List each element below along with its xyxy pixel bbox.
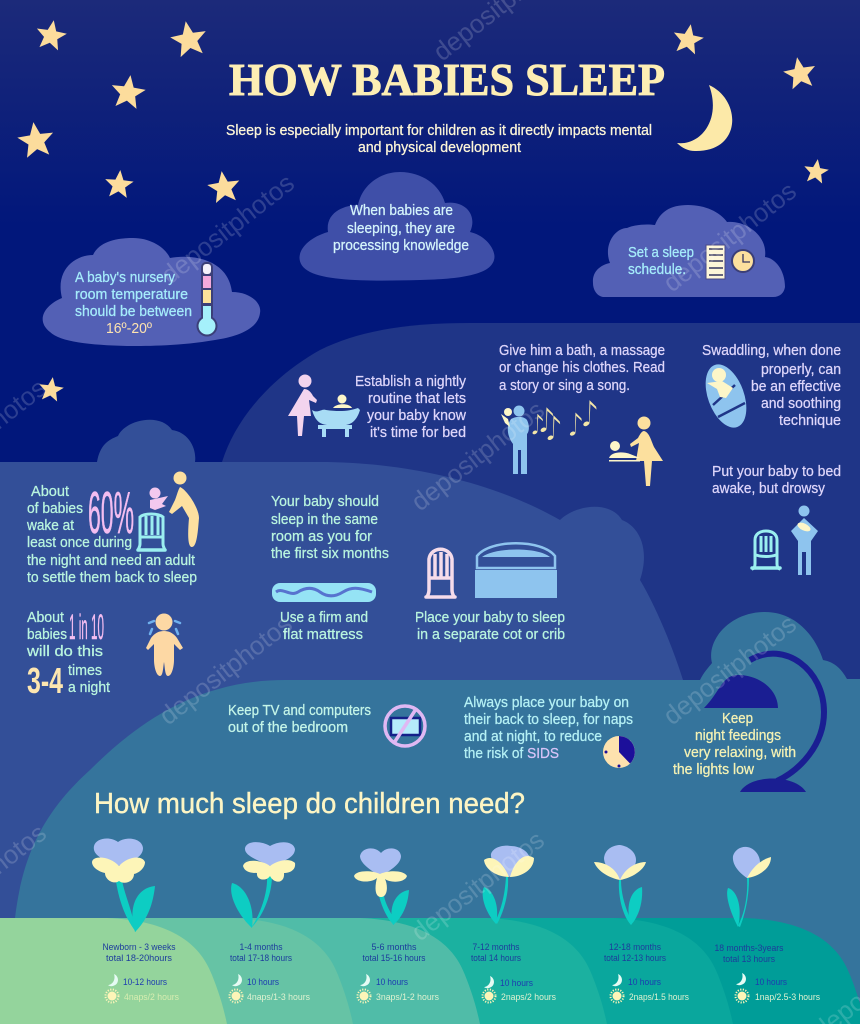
cloud: nursery temperature: [43, 238, 260, 346]
icon: crib: [426, 549, 455, 597]
text: 60 percent wake: the night and need an adult: [27, 553, 195, 569]
column: 1-4 months: 1-4 months: [240, 942, 283, 953]
text: no TV: Keep TV and computers: [228, 703, 371, 719]
cloud: processing knowledge: [300, 172, 494, 281]
stat: 3-4: 3-4: [27, 660, 63, 701]
icon: music notes: [532, 400, 597, 440]
text: same room: sleep in the same: [271, 512, 378, 528]
column: 1-4 months: [230, 942, 310, 1003]
icon: schedule sheet: [706, 245, 725, 279]
text: 1 in 10 babies: About: [27, 610, 64, 626]
watermarks: depositphotos: [405, 825, 550, 947]
column: 5-6 months: 10 hours: [376, 977, 408, 988]
text: swaddling: properly, can: [761, 362, 841, 378]
column: 18 months-3 years: total 13 hours: [723, 954, 775, 965]
cloud: processing knowledge: processing knowledge: [333, 238, 469, 254]
text: 60 percent wake: wake at: [26, 518, 74, 534]
heading: how much sleep: How much sleep do children need?: [94, 788, 525, 820]
cloud: nursery temperature: room temperature: [75, 287, 188, 303]
column: 12-18 months: 12-18 months: [609, 942, 661, 953]
cloud: sleep schedule: Set a sleep: [628, 245, 694, 261]
text: 1 in 10 babies: times: [68, 663, 102, 679]
flower: 1-4 months: [231, 842, 295, 928]
column: 12-18 months: total 12-13 hours: [604, 953, 666, 964]
text: back to sleep SIDS: Always place your baby on: [464, 695, 629, 711]
text: separate cot: [415, 610, 565, 643]
column: 7-12 months: 2naps/2 hours: [501, 992, 556, 1003]
icon: swaddled baby: [698, 359, 754, 433]
title: HOW BABIES SLEEP: [229, 54, 665, 105]
hill: teal layer with cloud: [15, 612, 860, 1024]
column: 5-6 months: total 15-16 hours: [362, 953, 426, 964]
column: 12-18 months: 10 hours: [628, 977, 661, 988]
icon: clock pie: [603, 736, 635, 768]
text: 1 in 10 babies: will do this: [26, 644, 103, 660]
ground hills: [0, 918, 860, 1024]
text: awake but drowsy: awake, but drowsy: [712, 481, 826, 497]
column: 12-18 months: [604, 942, 689, 1003]
subtitle: [226, 123, 652, 156]
column: 1-4 months: 4naps/1-3 hours: [247, 992, 310, 1003]
text: 1 in 10 babies: [26, 608, 110, 696]
text: swaddling: technique: [779, 413, 841, 429]
column: 5-6 months: 5-6 months: [372, 942, 417, 953]
flower: 5-6 months: [354, 848, 409, 925]
text: 60 percent wake: to settle them back to sleep: [27, 570, 197, 586]
text: firm mattress: Use a firm and: [280, 610, 368, 626]
text: swaddling: and soothing: [761, 396, 841, 412]
icon: person holding baby by crib: [752, 506, 818, 575]
flower: 18 months-3 years: [727, 847, 771, 927]
column: newborn: 4naps/2 hours: [124, 992, 179, 1003]
text: nightly routine: routine that lets: [368, 391, 466, 407]
text: swaddling: [702, 343, 841, 429]
column: 7-12 months: 10 hours: [500, 978, 533, 989]
text: 1 in 10 babies: babies: [27, 627, 67, 643]
text: back to sleep SIDS: their back to sleep, for naps: [464, 712, 633, 728]
icon: clock: [732, 250, 754, 272]
subtitle: Sleep is especially important for children as it directly impacts mental: [226, 123, 652, 139]
text: 60 percent wake: of babies: [27, 501, 83, 517]
text: awake but drowsy: [712, 464, 841, 497]
text: bath and massage: Give him a bath, a massage: [499, 343, 665, 359]
text: night feedings: the lights low: [673, 762, 755, 778]
text: night feedings: Keep: [722, 711, 753, 727]
text: night feedings: [673, 711, 796, 778]
column: 7-12 months: total 14 hours: [471, 953, 521, 964]
text: back to sleep SIDS: [464, 695, 633, 762]
subtitle: and physical development: [358, 140, 521, 156]
text: nightly routine: it's time for bed: [370, 425, 466, 441]
text: bath and massage: a story or sing a song.: [499, 378, 630, 394]
text: 1 in 10 babies: a night: [68, 680, 110, 696]
text: no TV: out of the bedroom: [228, 720, 348, 736]
column: 18 months-3 years: 1nap/2.5-3 hours: [755, 992, 820, 1003]
flower: newborn: [92, 839, 155, 932]
text: swaddling: Swaddling, when done: [702, 343, 841, 359]
icon: no television: [385, 706, 425, 746]
icon: mother and bath: [288, 374, 360, 437]
text: back to sleep SIDS: the risk of SIDS: [464, 746, 559, 762]
cloud: nursery temperature: should be between: [75, 304, 192, 320]
text: no TV: [228, 703, 371, 736]
column: 12-18 months: 2naps/1.5 hours: [629, 992, 689, 1003]
text: back to sleep SIDS: and at night, to reduce: [464, 729, 602, 745]
column: 7-12 months: [471, 942, 556, 1003]
text: swaddling: be an effective: [751, 379, 841, 395]
column: newborn: [102, 942, 179, 1003]
text: nightly routine: Establish a nightly: [355, 374, 467, 390]
column: 18 months-3 years: [714, 943, 820, 1003]
text: 60 percent wake: 60%: [88, 480, 134, 546]
hill: middle layer with clouds: [0, 420, 683, 1024]
icon: thermometer: [196, 262, 218, 336]
column: 5-6 months: 3naps/1-2 hours: [376, 992, 439, 1003]
watermarks: depositphotos: [657, 176, 802, 298]
icon: adult lifting baby from crib: [138, 472, 199, 550]
text: firm mattress: [280, 610, 368, 643]
text: 60 percent wake: [26, 480, 197, 586]
cloud: nursery temperature: A baby's nursery: [75, 270, 176, 286]
text: bath and massage: or change his clothes. Read: [499, 360, 665, 376]
cloud: nursery temperature: 16º-20º: [106, 321, 153, 337]
text: bath and massage: [499, 343, 665, 394]
column: 7-12 months: 7-12 months: [472, 942, 520, 953]
text: 60 percent wake: least once during: [27, 535, 132, 551]
column: 18 months-3 years: 18 months-3years: [714, 943, 784, 954]
icon: crying baby: [146, 614, 183, 676]
cloud: sleep schedule: [593, 205, 785, 297]
text: 1 in 10: [69, 608, 104, 647]
cloud: sleep schedule: schedule.: [628, 262, 686, 278]
icon: lamp: [704, 654, 824, 792]
text: same room: the first six months: [271, 546, 389, 562]
text: nightly routine: [355, 374, 467, 441]
text: 60 percent wake: About: [31, 484, 69, 500]
column: 18 months-3 years: 10 hours: [755, 977, 787, 988]
icon: mother massaging baby: [609, 416, 663, 486]
hill: back layer: [222, 323, 860, 700]
watermarks: depositphotos: [657, 609, 802, 731]
column: newborn: 10-12 hours: [123, 977, 167, 988]
text: nightly routine: your baby know: [367, 408, 467, 424]
flower: 12-18 months: [594, 845, 646, 925]
text: separate cot: Place your baby to sleep: [415, 610, 565, 626]
cloud: processing knowledge: When babies are: [350, 203, 453, 219]
text: same room: Your baby should: [271, 494, 379, 510]
text: firm mattress: flat mattress: [283, 627, 363, 643]
watermarks: depositphotos: [153, 609, 298, 731]
text: same room: [271, 494, 389, 562]
text: night feedings: night feedings: [695, 728, 781, 744]
watermarks: depositphotos: [155, 168, 300, 290]
text: same room: room as you for: [271, 529, 372, 545]
icon: bed: [475, 543, 557, 598]
column: newborn: Newborn - 3 weeks: [102, 942, 176, 953]
column: 1-4 months: 10 hours: [247, 977, 279, 988]
column: newborn: total 18-20hours: [106, 953, 172, 964]
column: 5-6 months: [358, 942, 439, 1003]
text: separate cot: in a separate cot or crib: [417, 627, 565, 643]
stars: [15, 18, 830, 402]
text: night feedings: very relaxing, with: [684, 745, 796, 761]
column: 1-4 months: total 17-18 hours: [230, 953, 292, 964]
flower: 7-12 months: [483, 846, 534, 924]
cloud: processing knowledge: sleeping, they are: [347, 221, 455, 237]
icon: crescent moon: [677, 85, 732, 151]
icon: mattress: [272, 583, 376, 602]
text: awake but drowsy: Put your baby to bed: [712, 464, 841, 480]
icon: father holding baby: [501, 406, 529, 474]
watermarks: depositphotos: [405, 395, 550, 517]
